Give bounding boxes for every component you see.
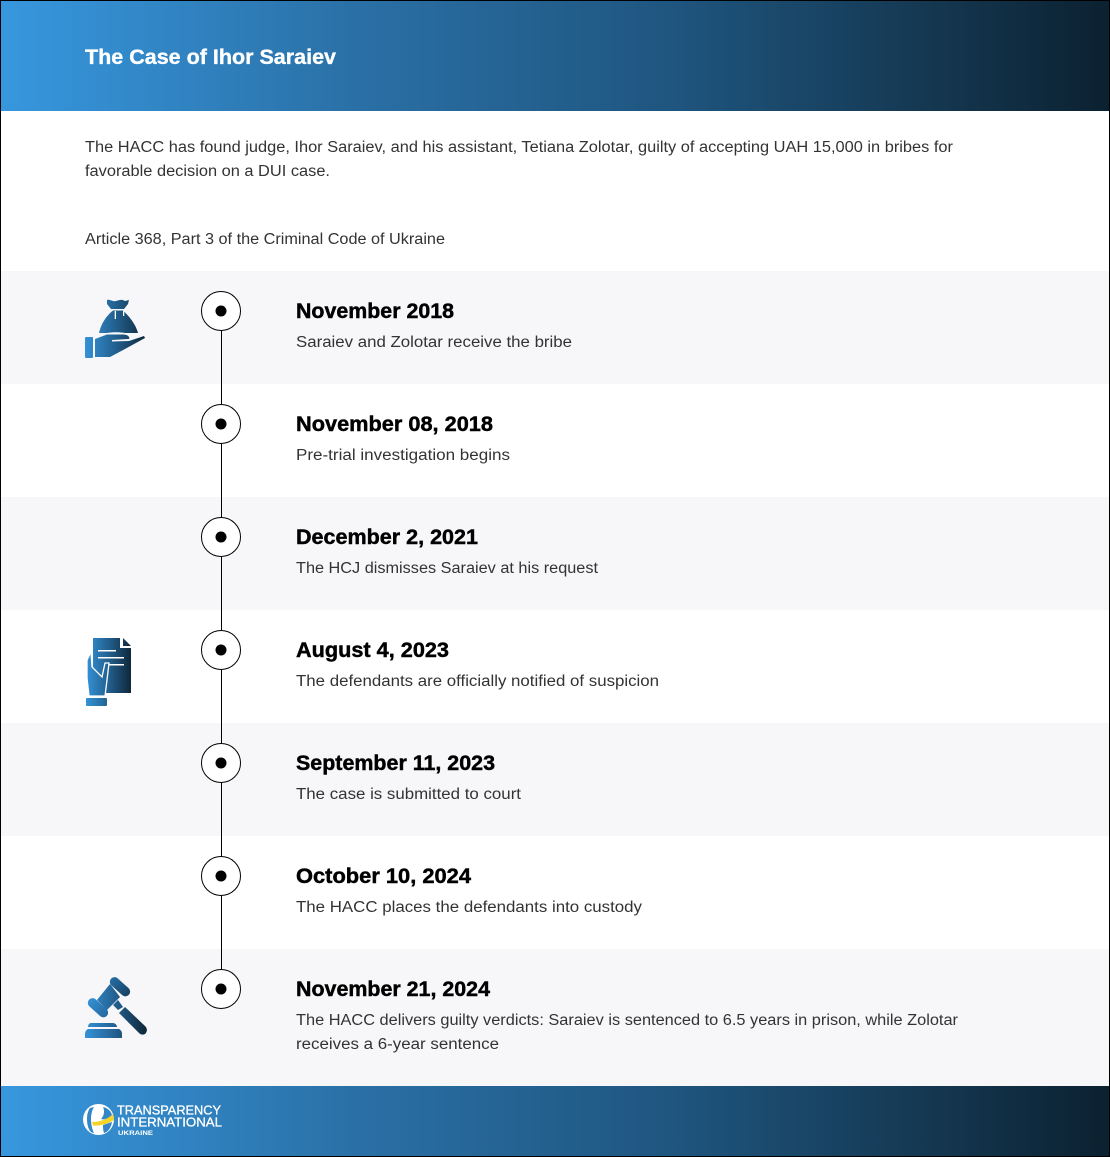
icon: judge gavel <box>85 975 147 1038</box>
description: The HCJ dismisses Saraiev at his request <box>296 560 599 577</box>
case summary line 2: favorable decision on a DUI case. <box>85 163 330 180</box>
date: August 4, 2023 <box>296 639 449 662</box>
logo wordmark: TRANSPARENCY <box>117 1102 221 1118</box>
description: The HACC places the defendants into custody <box>296 899 642 916</box>
date: September 11, 2023 <box>296 752 495 775</box>
marker <box>202 970 240 1008</box>
row backgrounds <box>1 271 1109 1086</box>
date: November 2018 <box>296 300 454 323</box>
timeline event: August 4, 2023 <box>202 630 659 690</box>
description: The case is submitted to court <box>296 786 522 803</box>
footer banner <box>1 1086 1109 1156</box>
date: November 08, 2018 <box>296 413 493 436</box>
logo wordmark line 2: INTERNATIONAL <box>117 1114 222 1130</box>
description: Saraiev and Zolotar receive the bribe <box>296 334 572 351</box>
description: The defendants are officially notified of suspicion <box>296 673 659 690</box>
legal article reference: Article 368, Part 3 of the Criminal Code of Ukraine <box>85 231 445 248</box>
title: The Case of Ihor Saraiev <box>85 46 336 69</box>
marker <box>202 518 240 556</box>
header gradient band <box>1 1 1109 111</box>
timeline event: November 2018 <box>202 292 572 351</box>
marker <box>202 856 240 896</box>
logo globe <box>83 1104 114 1135</box>
marker <box>202 292 240 330</box>
logo wordmark line 3: UKRAINE <box>118 1130 154 1137</box>
footer gradient band <box>1 1086 1109 1156</box>
timeline event: September 11, 2023 <box>202 744 522 803</box>
timeline line <box>220 311 222 989</box>
icon: hand holding document <box>86 638 131 706</box>
intro text block <box>85 139 953 248</box>
date: October 10, 2024 <box>296 865 471 888</box>
date: November 21, 2024 <box>296 978 490 1001</box>
description: Pre-trial investigation begins <box>296 447 510 464</box>
date: December 2, 2021 <box>296 526 478 549</box>
Transparency International Ukraine logo <box>83 1102 222 1137</box>
timeline event: November 08, 2018 <box>202 404 510 464</box>
description: The HACC delivers guilty verdicts: Saraiev is sentenced to 6.5 years in prison, while Zolotar <box>296 1012 958 1029</box>
description line 2: receives a 6-year sentence <box>296 1036 499 1053</box>
marker <box>202 630 240 670</box>
icon: money bag on hand <box>85 300 145 358</box>
timeline event: October 10, 2024 <box>202 856 642 916</box>
case summary: The HACC has found judge, Ihor Saraiev, and his assistant, Tetiana Zolotar, guilty of accepting UAH 15,000 in bribes for <box>85 139 953 156</box>
timeline event: December 2, 2021 <box>202 518 599 577</box>
marker <box>202 404 240 444</box>
marker <box>202 744 240 782</box>
header banner <box>1 1 1109 111</box>
timeline event: November 21, 2024 <box>202 970 958 1053</box>
